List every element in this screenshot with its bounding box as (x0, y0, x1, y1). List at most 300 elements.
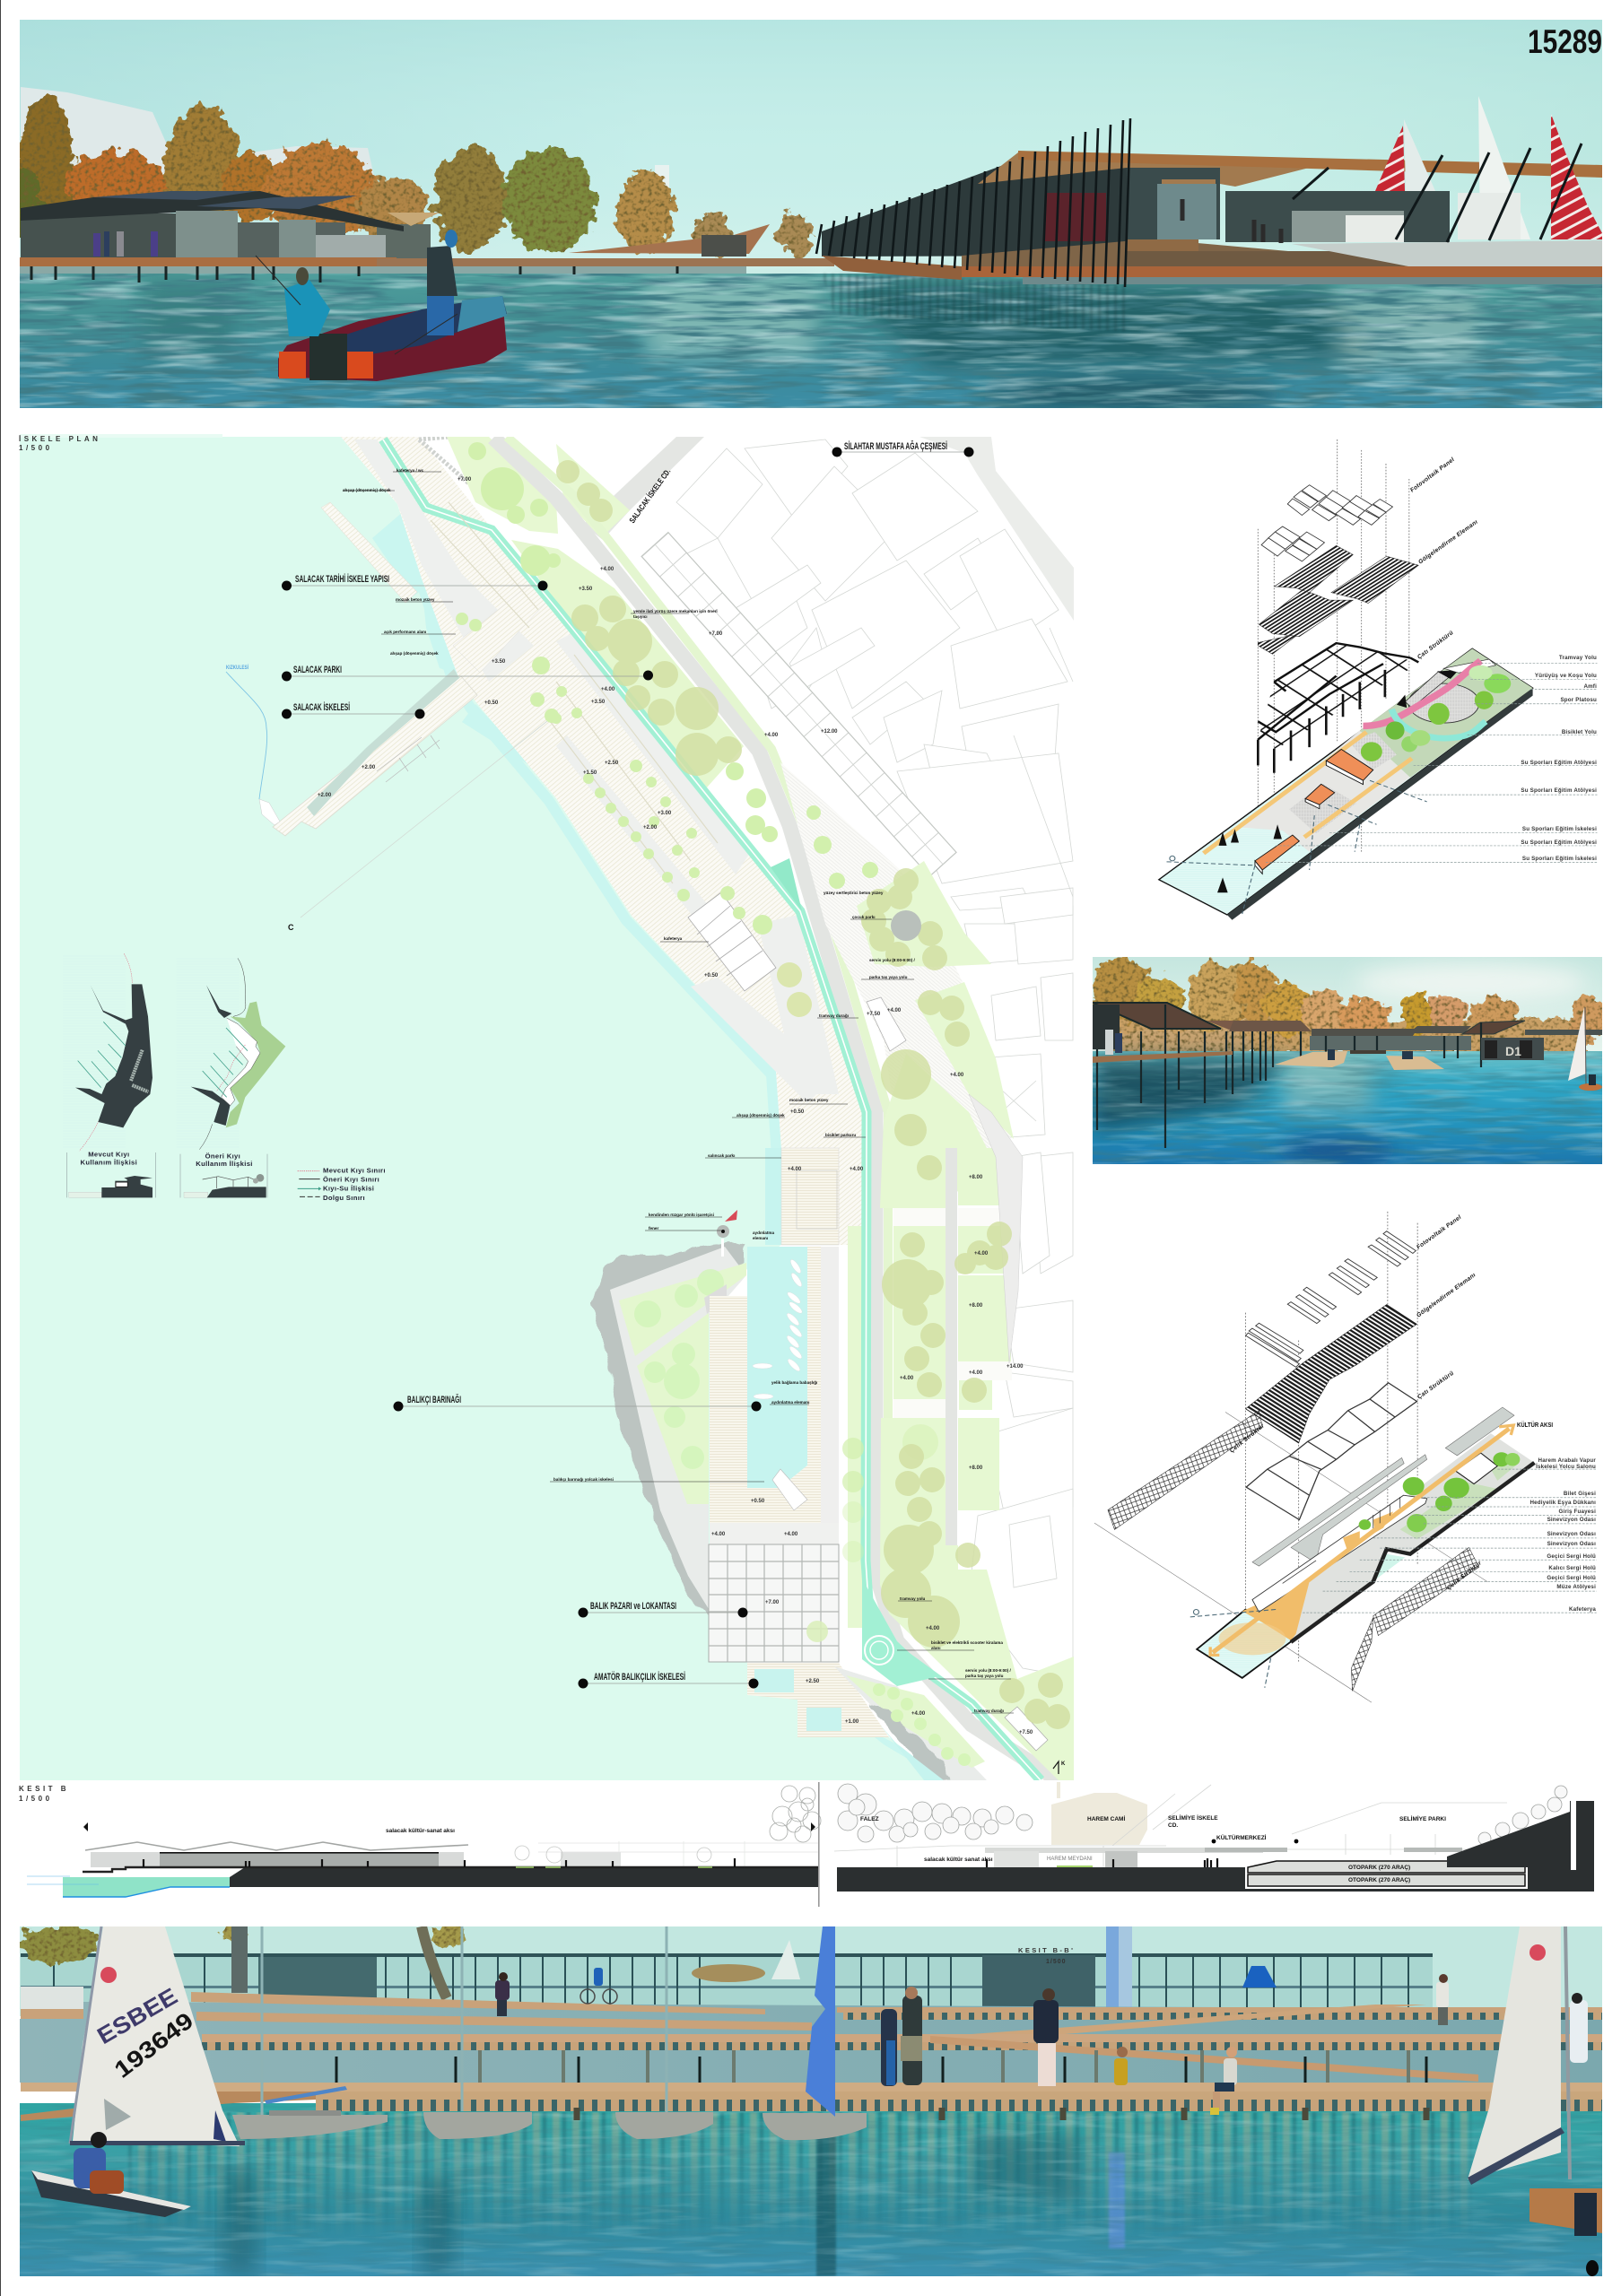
small plan annotations: yemle ilati yürüş üzere mekanları için önerî (633, 609, 718, 613)
sketch trees (838, 1784, 1567, 1845)
section line C (301, 718, 552, 918)
left white wall (21, 1987, 83, 2010)
elevation marks: +1.50 (583, 770, 597, 776)
people on the quay (495, 1968, 1449, 2115)
base plate (1197, 1433, 1534, 1678)
deck and floating platforms (1093, 1050, 1444, 1070)
bollards (336, 2057, 1426, 2088)
legend (298, 1166, 386, 1202)
mini section: existing (66, 1152, 155, 1197)
section axis label: salacak kültür-sanat aksı (386, 1828, 455, 1834)
site plate side wall (1227, 688, 1533, 920)
fish market roof grid (709, 1544, 839, 1662)
axon 2 labels: Geçici Sergi Holü (1547, 1575, 1596, 1581)
background sails and flag (692, 1926, 1277, 2007)
elevation marks: +4.00 (900, 1376, 914, 1381)
promenade hatched ground (341, 437, 862, 1245)
heading: Balık Pazarı ve Lokantası: BALIK PAZARI ve LOKANTASI (590, 1601, 676, 1612)
view direction dashes and eye icon (1166, 780, 1427, 914)
small plan annotations: tramvay durağı (974, 1709, 1004, 1713)
section title in render (1018, 1946, 1075, 1965)
elevation marks: +3.50 (579, 587, 593, 592)
small plan annotations: çocuk parkı (852, 915, 876, 919)
standing man (1033, 1988, 1059, 2086)
background glazed building (21, 1953, 1433, 2007)
axon 2 labels: Çatı Strüktürü (1416, 1370, 1455, 1401)
heading: Salacak İskelesi: SALACAK İSKELESİ (293, 701, 350, 713)
eastern parks (848, 861, 1074, 1780)
sketch trees (770, 1786, 821, 1842)
section B left half (19, 1782, 821, 1907)
axon 2 labels: Geçici Sergi Holü (1547, 1553, 1596, 1560)
promenade grey paving bands (354, 439, 839, 1103)
axon 2 labels: Çelik Strüktür (1446, 1560, 1483, 1592)
harbour breakwater (610, 1247, 746, 1609)
shallow shoreline water (372, 511, 960, 1780)
elevation marks: +7.00 (458, 477, 472, 483)
axon 2 labels: Kalıcı Sergi Holü (1548, 1565, 1596, 1571)
small plan annotations: kafeterya (664, 936, 683, 941)
axon 1 labels: Çatı Strüktürü (1416, 630, 1455, 661)
quays (710, 1148, 839, 1544)
cyclist (580, 1968, 617, 2004)
caption: Mevcut Kıyı Kullanım İlişkisi: Kullanım İlişkisi (81, 1158, 137, 1166)
axon 2 labels: Harem Arabalı Vapur (1538, 1457, 1596, 1464)
elevation marks: +12.00 (821, 729, 838, 735)
callout dots (282, 447, 974, 1688)
heading: Silahtar Mustafa Ağa Çeşmesi: SİLAHTAR MUSTAFA AĞA ÇEŞMESİ (844, 440, 947, 452)
sea (20, 437, 924, 1780)
elevation marks: +7.50 (1019, 1730, 1033, 1735)
small plan annotations: ahşap (döşenmiş) döşek (343, 488, 391, 492)
crossing lines in city blocks (1003, 628, 1073, 1121)
autumn trees (11, 96, 814, 257)
axon 1 labels: Fotovoltaik Panel (1409, 457, 1456, 494)
axon 1 labels: Yürüyüş ve Koşu Yolu (1535, 673, 1597, 679)
right dinghy sail (1468, 1926, 1588, 2185)
elevation marks: +4.00 (711, 1532, 726, 1537)
east bank paving (780, 762, 1014, 1148)
elevation marks: +4.00 (974, 1251, 989, 1257)
zigzag roof (85, 1842, 468, 1850)
elevation marks: +8.00 (969, 1303, 983, 1309)
roof structure (1258, 643, 1418, 773)
axon 1 labels (1409, 457, 1597, 862)
elevation marks: +4.00 (950, 1073, 964, 1078)
pink walking track (1364, 661, 1481, 726)
playground (891, 910, 921, 941)
axon 1 labels: Su Sporları Eğitim Atölyesi (1521, 839, 1597, 846)
projection lines (1245, 1212, 1417, 1663)
breakwater gardens (619, 1263, 746, 1504)
steel structure: right (1351, 1547, 1479, 1691)
blue central sail (806, 1926, 835, 2117)
caption: Mevcut Kıyı Kullanım İlişkisi: Mevcut Kıyı (88, 1150, 129, 1158)
heading: Balıkçı Barınağı: BALIKÇI BARINAĞI (407, 1394, 461, 1405)
small plan annotations: yüzey sertleştirici beton yüzey (824, 891, 884, 895)
white building east of road (688, 892, 1048, 1751)
axon 2 labels: Sinevizyon Odası (1547, 1541, 1596, 1547)
axon 1 labels: Amfi (1583, 683, 1597, 690)
elevation marks: +0.50 (484, 700, 499, 706)
small plan annotations: parka taş yaya yolu (965, 1674, 1004, 1678)
timber terraces (21, 1992, 1602, 2082)
moored boats (753, 1258, 804, 1399)
elevation marks: +8.00 (969, 1465, 983, 1471)
caption: Öneri Kıyı Kullanım İlişkisi (196, 1152, 253, 1168)
elevation marks: +2.00 (362, 765, 376, 770)
autumn tree line (1089, 957, 1606, 1058)
legend: Dolgu Sınırı (323, 1194, 365, 1202)
section title (19, 1785, 69, 1803)
hatched paving bands between parks (893, 1208, 1012, 1418)
label: section marker C: C (288, 923, 294, 932)
section B right half (834, 1782, 1594, 1892)
axon 1 labels: Su Sporları Eğitim İskelesi (1522, 826, 1597, 832)
underground car park: OTOPARK (270 ARAÇ) (1348, 1877, 1410, 1883)
left dinghy sail: ESBEE (92, 1982, 182, 2049)
small plan annotations: servis yolu (8:00-9:00) / (869, 958, 916, 962)
elevation marks: +1.00 (845, 1719, 859, 1725)
heading: İskele Plan 1/500: 1/500 (19, 444, 53, 452)
axon 1 labels: Gölgelendirme Elemanı (1417, 519, 1479, 566)
sailing dinghy (1568, 1007, 1602, 1091)
seated woman (1210, 2047, 1237, 2115)
section labels: salacak kültür sanat aksı (924, 1857, 993, 1863)
caption: Öneri Kıyı Kullanım İlişkisi: Kullanım İlişkisi (196, 1160, 253, 1168)
elevation marks: +2.00 (318, 793, 332, 798)
elevation marks: +4.00 (784, 1532, 798, 1537)
axon 1 labels: Bisiklet Yolu (1562, 729, 1597, 735)
landscape zone (1360, 648, 1533, 778)
axon 2 labels: KÜLTÜR AKSI (1517, 1421, 1553, 1429)
yellow paths (1204, 732, 1412, 853)
small plan annotations: ahşap (döşenmiş) döşek (390, 651, 439, 656)
large canopy trees (556, 460, 1070, 1729)
underground car park: OTOPARK (270 ARAÇ) (1348, 1865, 1410, 1871)
section labels: HAREM MEYDANI (1047, 1857, 1093, 1862)
shading ribbon (1245, 1305, 1416, 1443)
left dinghy sail (70, 1926, 245, 2146)
elevation marks: +3.50 (591, 700, 606, 705)
axon 2 labels: İskelesi Yolcu Salonu (1536, 1464, 1596, 1470)
elevation marks: +4.00 (911, 1711, 926, 1717)
small plan annotations: yelik bağlama babaşlığı (771, 1380, 817, 1385)
left pavilions (20, 191, 834, 283)
amateur fishing piers (747, 1663, 889, 1737)
fishing boat and fishermen (256, 230, 507, 381)
label leader lines (1303, 1469, 1597, 1613)
small plan annotations: kafeterya / wc (397, 468, 424, 473)
grey slabs (1252, 1407, 1514, 1566)
heading: İskele Plan 1/500 (19, 434, 222, 452)
render: stepped timber quay with sailing dinghies (20, 1924, 1602, 2276)
elevation marks: +2.50 (806, 1679, 820, 1684)
render: pavilions over water (1089, 957, 1606, 1164)
long construction lines (1094, 1413, 1487, 1702)
seated child (1114, 2047, 1128, 2085)
elevation marks: +4.00 (850, 1167, 864, 1172)
amphitheatre and sports circle (1397, 659, 1495, 723)
axon 2 labels: Gölgelendirme Elemanı (1416, 1272, 1477, 1319)
small plan annotations: elemanı (753, 1236, 768, 1240)
axon 2 labels: Fotovoltaik Panel (1416, 1214, 1462, 1251)
elevation marks: +0.50 (751, 1499, 765, 1504)
elevation marks: +3.00 (658, 811, 672, 816)
ghost structures (834, 1785, 1507, 1867)
small plan annotations: tramvay yolu (900, 1596, 926, 1601)
main timber deck (21, 2083, 1602, 2121)
green plaza strip (1057, 1866, 1093, 1867)
section labels: SELİMİYE İSKELE (1168, 1814, 1218, 1822)
axon 2 labels: Sinevizyon Odası (1547, 1517, 1596, 1523)
pavilion block (1455, 1453, 1497, 1484)
page edge line (0, 0, 1, 2296)
visitor group (881, 1987, 922, 2086)
heading: Salacak Parkı: SALACAK PARKI (293, 665, 342, 675)
annotation leader lines (343, 472, 1014, 1713)
linear museum building (1252, 1495, 1427, 1612)
teal wedge and tram roundabout (862, 1578, 936, 1686)
teal triangle (771, 858, 802, 911)
small plan annotations: balıkçı barınağı yolcak iskelesi (553, 1477, 614, 1482)
pier radial connector (453, 578, 545, 673)
elevation marks: +3.50 (492, 659, 506, 665)
axon 2 labels: Hediyelik Eşya Dükkanı (1529, 1500, 1596, 1506)
elevation marks: +14.00 (1007, 1364, 1024, 1370)
axon 2 labels: Sinevizyon Odası (1547, 1531, 1596, 1537)
upper park (447, 437, 630, 538)
small plan annotations: servis yolu (8:00-9:00) / (965, 1668, 1012, 1673)
section labels: KÜLTÜRMERKEZİ (1216, 1833, 1267, 1841)
elevation marks: +4.00 (926, 1626, 940, 1631)
project number: 15289 (1528, 23, 1602, 60)
section labels (860, 1814, 1446, 1863)
north–south footpath (946, 1148, 957, 1545)
elevation marks: +2.00 (643, 825, 658, 831)
upper right road (919, 437, 1074, 621)
elevation marks: +8.00 (969, 1175, 983, 1180)
axon 1 labels: Su Sporları Eğitim İskelesi (1522, 856, 1597, 862)
elevation marks: +0.50 (790, 1109, 805, 1115)
left dinghy hull and sailor (31, 2132, 191, 2217)
elevation marks: +4.00 (764, 733, 779, 738)
road between park and buildings (493, 438, 1059, 1780)
plan: İskele Plan 1/500 (20, 437, 1074, 1780)
elevation marks: +0.50 (704, 973, 719, 978)
left dinghy sail: 193649 (109, 2006, 198, 2083)
site base plate (1159, 648, 1533, 915)
axon 2 labels: Bilet Gişesi (1564, 1491, 1596, 1497)
elevation marks: +4.00 (600, 567, 614, 572)
heading: İskele Plan 1/500: İSKELE PLAN (19, 435, 100, 443)
axon 2 labels: Kafeterya (1569, 1606, 1596, 1613)
dark fin-screened facade (822, 160, 1127, 257)
lighthouse and wind sculpture (717, 1210, 737, 1257)
right pier structure with fins (816, 96, 1602, 287)
retaining slot (1571, 1801, 1576, 1870)
section labels: HAREM CAMİ (1087, 1815, 1125, 1822)
culture axis arrow (1210, 1425, 1513, 1655)
section labels: FALEZ (860, 1816, 879, 1822)
axon 2 labels: Müze Atölyesi (1556, 1584, 1596, 1590)
axonometric 2: museum and culture axis (1094, 1212, 1597, 1702)
mainland (341, 437, 1074, 1780)
teal cycling path (1391, 709, 1486, 738)
small plan annotations: aydınlatma elemanı (771, 1400, 809, 1405)
green verge along road (507, 437, 888, 1565)
elevation marks (318, 477, 1033, 1735)
sails (1375, 96, 1602, 239)
black dot marker (1586, 2260, 1599, 2276)
riprap rocks (592, 1242, 743, 1613)
small plan annotations: kendinden rüzgar yönlü işaretçisi (649, 1213, 714, 1217)
section people (144, 1858, 735, 1867)
small plan annotations: bisiklet ve elektrikli scooter kiralama (931, 1640, 1003, 1645)
section labels: SELİMİYE PARKI (1399, 1815, 1446, 1822)
section axis label (83, 1822, 815, 1834)
suspended dinghies (232, 2086, 867, 2140)
small plan annotations: alanı (931, 1646, 940, 1650)
heading: Salacak Tarihi İskele Yapısı: SALACAK TARİHİ İSKELE YAPISI (295, 573, 389, 585)
elevation marks: +4.00 (887, 1008, 902, 1013)
section labels: CD. (1168, 1822, 1178, 1829)
axon 1 labels: Spor Platosu (1560, 697, 1597, 703)
small plan annotations: ahşap (döşenmiş) döşek (736, 1113, 785, 1118)
water hatch (63, 953, 240, 1148)
heading: Amatör Balıkçılık İskelesi: AMATÖR BALIKÇILIK İSKELESİ (594, 1671, 685, 1683)
elevation marks: +7.00 (765, 1600, 780, 1605)
south lower park and rocks (834, 1666, 987, 1780)
elevation marks: +2.50 (605, 761, 619, 766)
map: proposed shoreline (191, 958, 285, 1150)
D1 pavilion (1481, 1038, 1544, 1060)
label leader lines (1266, 663, 1597, 863)
north arrow (1053, 1761, 1066, 1774)
small plan annotations: salıncak parkı (708, 1153, 735, 1158)
faint ghost structure (538, 1841, 818, 1867)
elevation marks: +4.00 (788, 1167, 802, 1172)
distant white towers (21, 87, 669, 213)
main park (511, 540, 744, 787)
axon 2 labels (1229, 1214, 1596, 1613)
north arrow: K (1061, 1761, 1066, 1767)
trees (1359, 1452, 1520, 1532)
hillside cut (1447, 1801, 1594, 1867)
steel structure: left (1108, 1411, 1262, 1529)
small plan annotations: parka taş yaya yolu (869, 975, 908, 979)
people on deck (1105, 1030, 1413, 1060)
elevation marks: +7.50 (867, 1012, 881, 1017)
plaza facades and deck (985, 1848, 1462, 1867)
small plan annotations: aydınlatma (753, 1231, 774, 1235)
section divider (818, 1782, 820, 1907)
label: Kızkulesi: KIZKULESİ (226, 665, 248, 671)
small plan annotations: taşıyıcı (633, 614, 648, 619)
axon 2 labels: Giriş Fuayesi (1559, 1509, 1596, 1515)
mini section: proposed (180, 1154, 267, 1197)
water (1093, 1051, 1602, 1164)
render: hero view of the pier and shore (11, 20, 1602, 413)
water (20, 2103, 1602, 2276)
water (20, 274, 1602, 413)
caption: Öneri Kıyı Kullanım İlişkisi: Öneri Kıyı (205, 1152, 240, 1160)
small plan annotations: mozaik beton yüzey (789, 1098, 829, 1102)
small planted trees (456, 442, 938, 1562)
ground cut and stairs (83, 1867, 818, 1887)
small plan annotations: mozaik beton yüzey (396, 597, 435, 602)
legend: Mevcut Kıyı Sınırı (323, 1166, 386, 1174)
man on right terrace (1436, 1974, 1449, 2025)
shading elements (1258, 545, 1418, 654)
map: existing shoreline (75, 953, 153, 1151)
caption: Mevcut Kıyı Kullanım İlişkisi (81, 1150, 137, 1166)
wall columns (480, 2050, 1408, 2083)
label: street name: SALACAK İSKELE CD. (627, 467, 672, 525)
small plan annotations: bisiklet parkuru (825, 1133, 856, 1137)
historic pier arms (259, 502, 477, 836)
section title: 1/500 (19, 1795, 53, 1803)
stepped access right of path (969, 1094, 1023, 1363)
hatched plaza zone (1242, 730, 1410, 852)
clouds (1355, 962, 1588, 1002)
ghost trees (515, 1846, 711, 1863)
small plan annotations: tramvay durağı (819, 1013, 849, 1018)
panel: shoreline relationship mini maps (63, 953, 386, 1202)
ground cut (837, 1867, 1594, 1892)
pergola roofs and posts (1093, 1003, 1602, 1148)
elevation marks: +7.00 (709, 631, 723, 637)
building elevation (91, 1852, 621, 1867)
photovoltaic panels (1261, 485, 1392, 561)
small plan annotations: fener (649, 1226, 658, 1231)
axonometric 1: water-sports pavilions (1159, 439, 1597, 920)
hatched seating stripes on promenade (431, 502, 718, 883)
projection lines (1258, 439, 1409, 864)
harbour basin (747, 1247, 807, 1488)
view direction dashes and eye icon (1190, 1609, 1276, 1688)
D1 pavilion: D1 (1505, 1044, 1521, 1058)
section people (987, 1858, 1217, 1867)
roof frame (1246, 1383, 1416, 1520)
underground car park (1245, 1858, 1528, 1889)
city blocks (676, 439, 1073, 1677)
small plan annotations (343, 468, 1012, 1713)
axon 1 labels: Tramvay Yolu (1559, 655, 1597, 661)
water body (27, 1876, 230, 1897)
masts (262, 1926, 667, 2115)
Kızkulesi connector (226, 672, 267, 799)
orange pavilions (1255, 749, 1373, 874)
trees behind (20, 1924, 466, 1998)
waterfront stepped cabins at the top (419, 437, 482, 485)
tram and bicycle strip (383, 439, 1041, 1780)
right dinghy hull (1529, 2188, 1602, 2236)
main callout lines (287, 452, 969, 1683)
small plan annotations: açık performans alanı (384, 630, 426, 634)
Salacak İskele street (583, 437, 704, 540)
concrete terrace wall (20, 2002, 1602, 2088)
sailboat icons (1217, 824, 1282, 892)
axon 1 labels: Su Sporları Eğitim Atölyesi (1521, 787, 1597, 794)
elevation marks: +4.00 (601, 687, 615, 692)
Harem mosque silhouette (1051, 1782, 1147, 1845)
legend: Kıyı-Su İlişkisi (323, 1185, 374, 1193)
elevation marks: +4.00 (969, 1370, 983, 1376)
photovoltaic strips (1245, 1231, 1416, 1367)
seated man on upper terrace (495, 1972, 510, 2016)
section title: KESIT B (19, 1785, 69, 1793)
